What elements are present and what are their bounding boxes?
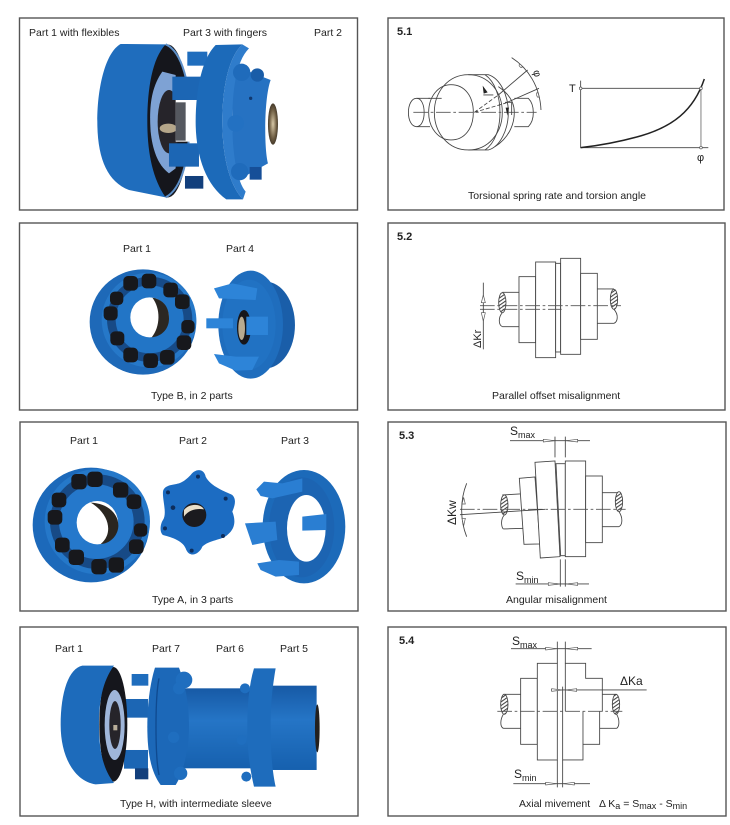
- label: S max: max: [520, 640, 538, 650]
- label: part 4: Part 4: [226, 243, 254, 255]
- panel: type B in 2 parts: [20, 223, 358, 410]
- caption: axial movement formula: = S: [620, 798, 639, 810]
- diagram: axial movement: [497, 642, 647, 787]
- label: delta Kr: ΔKr: [472, 329, 484, 348]
- panel: 5.1 torsional spring rate: [388, 18, 724, 210]
- caption: axial movement formula: min: [673, 801, 687, 811]
- label: S min: S: [514, 767, 522, 781]
- image: assembled blue coupling: [97, 44, 278, 199]
- label: part 2: Part 2: [179, 435, 207, 447]
- label: phi angle: φ: [530, 69, 544, 79]
- heading: 5.4: 5.4: [399, 635, 415, 647]
- image: part 2 star plate: [161, 470, 235, 554]
- diagram: torsion of coupling: [408, 58, 708, 150]
- caption: axial movement formula: max: [639, 801, 657, 811]
- panel: 5.4 axial movement: [388, 627, 726, 816]
- caption: angular misalignment: Angular misalignment: [506, 594, 607, 606]
- label: S min: min: [522, 773, 537, 783]
- label: part 6: Part 6: [216, 643, 244, 655]
- label: part 1: Part 1: [123, 243, 151, 255]
- heading: 5.1: 5.1: [397, 26, 412, 38]
- label: part 5: Part 5: [280, 643, 308, 655]
- label: S max: max: [518, 430, 536, 440]
- label: torque axis: T: [569, 83, 576, 95]
- label: part 3 with fingers: Part 3 with fingers: [183, 27, 267, 39]
- heading: 5.3: 5.3: [399, 430, 414, 442]
- heading: 5.2: 5.2: [397, 231, 412, 243]
- caption: type H: Type H, with intermediate sleeve: [120, 798, 272, 810]
- caption: axial movement formula: a: [615, 801, 620, 811]
- label: part 1: Part 1: [55, 643, 83, 655]
- caption: axial movement formula: Axial mivement Δ K: [519, 798, 615, 810]
- label: angle axis: φ: [697, 152, 704, 164]
- panel: type H with intermediate sleeve: [20, 627, 358, 816]
- image: part 3 ring with fingers: [245, 470, 345, 583]
- image: part 1 hub with flexibles: [33, 468, 150, 582]
- label: part 3: Part 3: [281, 435, 309, 447]
- label: delta Kw: ΔKw: [445, 500, 459, 525]
- panel: 5.2 parallel offset: [388, 223, 725, 410]
- caption: parallel offset: Parallel offset misalignment: [492, 390, 620, 402]
- label: S min: S: [516, 569, 524, 583]
- panel: 5.3 angular misalignment: [388, 422, 726, 611]
- diagram: angular misalignment: [460, 437, 626, 587]
- panel: type A in 3 parts: [20, 422, 358, 611]
- caption: torsional spring rate: Torsional spring rate and torsion angle: [468, 190, 646, 202]
- caption: type B: Type B, in 2 parts: [151, 390, 233, 402]
- label: delta Ka: ΔKa: [620, 674, 643, 688]
- label: part 2: Part 2: [314, 27, 342, 39]
- label: S min: min: [524, 575, 539, 585]
- caption: type A: Type A, in 3 parts: [152, 594, 233, 606]
- label: S max: S: [512, 634, 520, 648]
- image: part 4 with fingers: [206, 271, 295, 379]
- label: part 7: Part 7: [152, 643, 180, 655]
- image: type H coupling: [61, 666, 320, 787]
- panel: assembled coupling: [20, 18, 358, 210]
- image: part 1 hub with flexibles: [90, 269, 196, 375]
- diagram: parallel offset misalignment: [480, 258, 621, 358]
- label: S max: S: [510, 424, 518, 438]
- caption: axial movement formula: - S: [656, 798, 673, 810]
- label: part 1: Part 1: [70, 435, 98, 447]
- label: part 1 with flexibles: Part 1 with flexibles: [29, 27, 119, 39]
